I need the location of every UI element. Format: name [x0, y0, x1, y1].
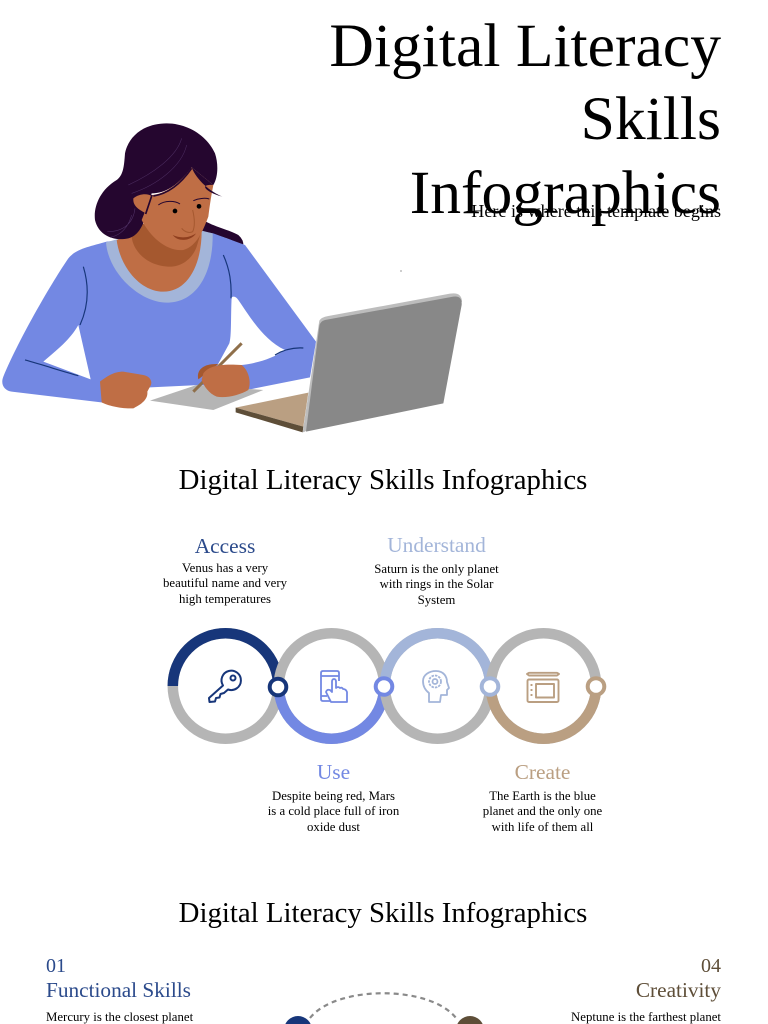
step: use: Use — [317, 760, 350, 784]
step: use: Despite being red, Mars — [272, 789, 395, 803]
icon: head with gear — [423, 671, 449, 702]
laptop base — [236, 393, 308, 427]
node: functional skills — [284, 1016, 312, 1024]
left hand — [100, 372, 151, 408]
item 04: creativity: 04 — [701, 955, 721, 977]
step: understand: Saturn is the only planet — [374, 562, 499, 576]
subtitle: Here is where this template begins — [471, 201, 721, 221]
ring: access — [173, 633, 278, 739]
title: Digital Literacy — [329, 12, 721, 80]
collar — [106, 231, 213, 303]
item 04: creativity: Creativity — [636, 978, 721, 1002]
step: create: The Earth is the blue — [489, 789, 596, 803]
step: understand: System — [418, 593, 455, 607]
pencil — [193, 343, 242, 392]
step: use: is a cold place full of iron — [268, 804, 400, 818]
dashed arc — [310, 993, 456, 1018]
right hand — [202, 365, 250, 397]
item 01: functional skills — [46, 955, 194, 1024]
eyes and brows — [158, 198, 209, 213]
step: access: Access — [195, 534, 255, 558]
item 01: functional skills: 01 — [46, 955, 66, 977]
speck — [400, 270, 402, 272]
step: understand: Understand — [387, 533, 486, 557]
item 01: functional skills: Mercury is the closest planet — [46, 1010, 194, 1024]
step: create — [483, 760, 603, 834]
hair behind shoulder — [202, 220, 243, 246]
section heading one: Digital Literacy Skills Infographics — [179, 464, 587, 496]
step: understand — [374, 533, 499, 607]
step: access: beautiful name and very — [163, 576, 288, 590]
chain diagram — [173, 633, 604, 739]
face — [142, 167, 213, 250]
neck — [117, 230, 202, 292]
section heading two: Digital Literacy Skills Infographics — [179, 897, 587, 929]
ring: use — [279, 633, 384, 739]
laptop screen rim — [303, 293, 462, 432]
item 04: creativity — [571, 955, 721, 1024]
ear — [133, 194, 151, 213]
bangs — [146, 168, 192, 214]
gaps between arms and torso — [43, 297, 285, 379]
step: create: planet and the only one — [483, 804, 603, 818]
thumb — [198, 364, 218, 379]
step: understand: with rings in the Solar — [380, 577, 494, 591]
ring: understand — [385, 633, 490, 739]
icon: drawing tablet — [527, 673, 559, 702]
laptop base edge — [236, 408, 303, 432]
paper — [150, 385, 263, 410]
title: Skills — [581, 85, 721, 153]
ring: create — [491, 633, 596, 739]
hair — [95, 123, 217, 239]
nose — [182, 210, 194, 232]
hair strands — [107, 138, 187, 237]
title: Infographics — [410, 159, 721, 227]
step: create: with life of them all — [492, 820, 594, 834]
step: create: Create — [515, 760, 570, 784]
icon: phone with hand — [321, 671, 347, 702]
title — [329, 12, 721, 227]
laptop screen — [306, 297, 462, 432]
neck shadow — [132, 223, 202, 267]
step: access: Venus has a very — [182, 561, 269, 575]
icon: key — [209, 671, 241, 702]
step: use — [268, 760, 400, 834]
illustration: woman at laptop — [2, 123, 462, 432]
sweater — [2, 232, 316, 403]
mouth — [173, 233, 196, 240]
item 04: creativity: Neptune is the farthest planet — [571, 1010, 721, 1024]
sweater fold lines — [25, 255, 303, 376]
node: creativity — [456, 1016, 484, 1024]
step: access: high temperatures — [179, 592, 271, 606]
step: use: oxide dust — [307, 820, 360, 834]
item 01: functional skills: Functional Skills — [46, 978, 191, 1002]
connector nodes — [270, 678, 604, 695]
step: access — [163, 534, 288, 606]
